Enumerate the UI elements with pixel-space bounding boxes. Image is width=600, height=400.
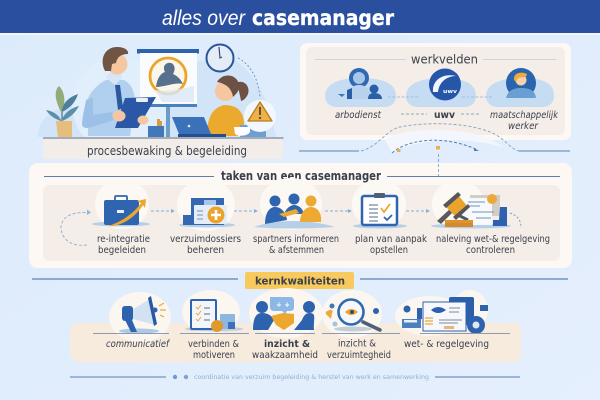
icon: laptop [172, 117, 226, 137]
task: naleving wet- & regelgeving controleren: naleving wet-& regelgeving [436, 234, 550, 245]
label: procesbewaking & begeleiding: procesbewaking & begeleiding [87, 144, 247, 158]
task: verzuimdossiers beheren: beheren [187, 245, 224, 256]
quality: inzicht & waakzaamheid: waakzaamheid [252, 350, 318, 361]
icon: clock [206, 44, 260, 97]
quality: inzicht & verzuimtegheid: verzuimtegheid [327, 350, 391, 361]
icon: presentation board [137, 49, 199, 137]
task: spartners informeren & afstemmen [253, 178, 339, 256]
quality: inzicht & waakzaamheid: + + [276, 301, 290, 309]
icon: caseworker man [82, 47, 156, 136]
arrow: step 2 to 3 [234, 209, 258, 213]
quality: communicatief: communicatief [106, 339, 170, 350]
panel: taken van een casemanager [29, 154, 572, 268]
icon: warning sign [244, 100, 276, 132]
header banner: casemanager [252, 6, 395, 30]
icon: pencil cup [148, 119, 164, 137]
item: uwv: uwv [443, 89, 458, 95]
icon: plant [46, 86, 79, 137]
task: spartners informeren & afstemmen: spartners informeren [253, 234, 339, 245]
item: arbodienst [325, 68, 396, 121]
icon: caseworker woman [207, 75, 266, 137]
heading: werkvelden: werkvelden [411, 52, 478, 66]
item: maatschappelijk werker [486, 68, 559, 132]
footer: line with faint text [70, 373, 520, 381]
task: verzuimdossiers beheren [170, 179, 241, 256]
panel: kernkwaliteiten band [70, 288, 521, 362]
task: naleving wet- & regelgeving controleren [431, 180, 550, 256]
task: naleving wet- & regelgeving controleren: controleren [466, 245, 515, 256]
quality: wet- & regelgeving: wet- & regelgeving [404, 339, 489, 350]
item: uwv [401, 68, 479, 121]
quality: verbinden & motiveren: verbinden & [188, 339, 239, 350]
quality: verbinden & motiveren [182, 290, 243, 361]
header banner [0, 0, 600, 35]
task: plan van aanpak opstellen: opstellen [370, 245, 408, 256]
task: re-integratie begeleiden: re-integratie [97, 234, 150, 245]
quality: inzicht & waakzaamheid [249, 288, 323, 361]
task: re-integratie begeleiden [92, 179, 150, 256]
arrow: step 4 to 5 [406, 209, 430, 213]
arrow: loop [61, 210, 91, 245]
task: plan van aanpak opstellen: plan van aanpak [355, 234, 427, 245]
quality: inzicht & verzuimtegheid: inzicht & [338, 338, 376, 350]
footer: line with faint text: coordinatie van verzuim begeleiding & herstel van werk en samenwerking [194, 373, 429, 381]
item: maatschappelijk werker: maatschappelijk [490, 110, 559, 121]
task: verzuimdossiers beheren: verzuimdossiers [170, 234, 241, 245]
quality: inzicht & waakzaamheid: inzicht & [264, 339, 310, 350]
task: re-integratie begeleiden: begeleiden [98, 245, 146, 256]
task: plan van aanpak opstellen [352, 180, 427, 256]
quality: inzicht & verzuimtegheid [322, 290, 391, 361]
item: uwv: uwv [434, 110, 455, 121]
quality: wet- & regelgeving [395, 290, 489, 350]
quality: communicatief [106, 292, 171, 350]
title: alles over [162, 7, 246, 30]
label: procesbewaking & begeleiding [43, 137, 284, 159]
arrow: step 3 to 4 [325, 209, 352, 213]
heading: kernkwaliteiten: kernkwaliteiten [255, 274, 345, 288]
task: spartners informeren & afstemmen: & afstemmen [269, 245, 324, 256]
arrows: connectors between panels [299, 124, 570, 153]
item: arbodienst: arbodienst [335, 110, 382, 121]
arrow: step 1 to 2 [151, 209, 175, 213]
panel: werkvelden [300, 43, 571, 140]
item: maatschappelijk werker: werker [508, 121, 539, 132]
heading: kernkwaliteiten [32, 272, 568, 289]
heading: taken van een casemanager: taken van een casemanager [221, 169, 381, 183]
quality: verbinden & motiveren: motiveren [193, 350, 235, 361]
panel: procesbewaking illustration [38, 44, 276, 153]
